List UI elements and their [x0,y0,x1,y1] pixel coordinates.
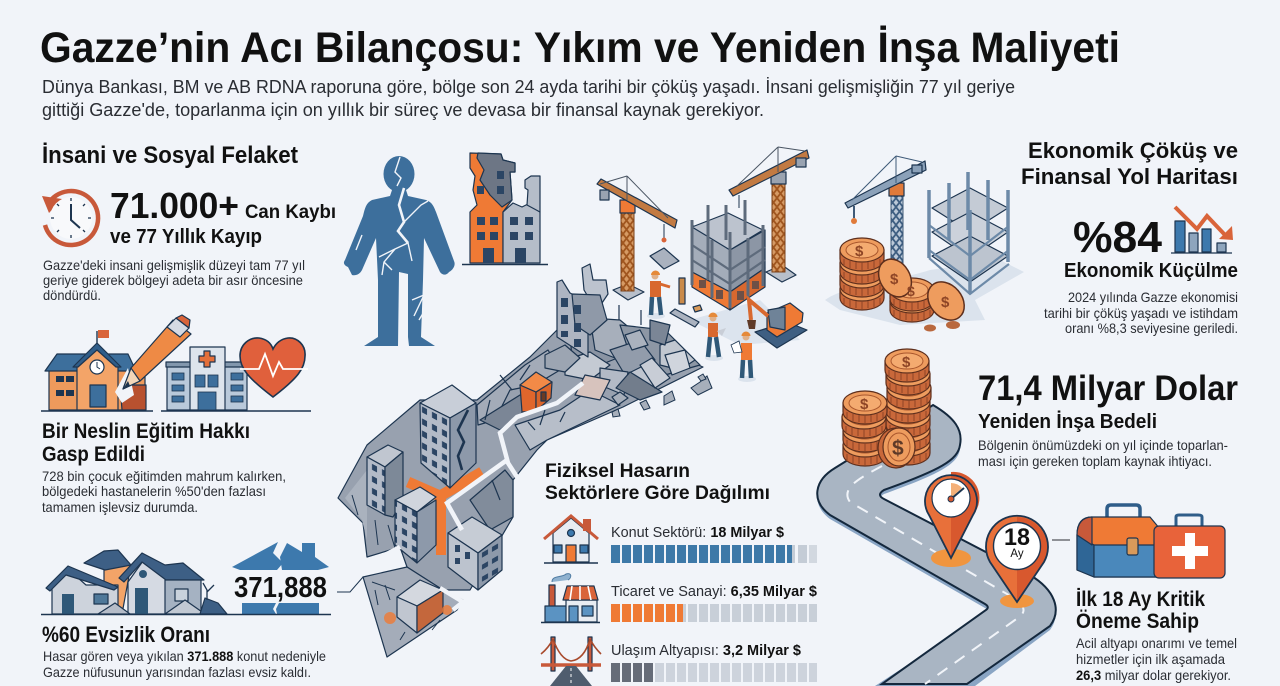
connector [1052,539,1070,541]
label: trade and industry: Ticaret ve Sanayi: 6,35 Milyar $ [611,583,818,600]
statistic: 71.000+ lives lost: ve 77 Yıllık Kayıp [110,226,262,248]
icon: broken roof with 371,888: 371,888 [234,572,327,604]
upper region of rubble [338,330,703,590]
icon: toolbox and medical kit [1077,505,1225,578]
leader line [337,577,363,592]
pin: timer [925,472,979,567]
text block: economy [1044,289,1238,336]
statistic: 71.000+ lives lost [110,185,336,248]
subheading: rebuilding cost: Yeniden İnşa Bedeli [978,410,1157,433]
label: transport: Ulaşım Altyapısı: 3,2 Milyar $ [611,642,802,659]
white cracks [363,383,583,610]
heading: education [42,419,250,466]
pin: 18 months: 18 [1004,524,1030,551]
text block: rebuilding cost: Bölgenin önümüzdeki on yıl içinde toparlan- [978,437,1228,453]
text block: first 18 months: 26,3 milyar dolar gerekiyor. [1076,667,1231,683]
text block: education: tamamen işlevsiz durumda. [42,499,198,515]
text block: economy: oranı %8,3 seviyesine geriledi. [1065,320,1238,336]
scattered debris [612,374,712,417]
bar: transport 3.2 billion [611,663,817,682]
pin: 18 months [986,516,1048,608]
construction materials [670,278,702,327]
icon: cracked human figure [344,156,455,346]
text block: education: bölgedeki hastanelerin %50'den fazlası [42,483,266,499]
statistic: 84 percent: %84 [1073,213,1163,262]
lower tower buildings and orange path [367,385,502,590]
chart heading [545,461,770,504]
crane 1 [597,176,679,300]
coin stacks: $ [855,243,864,260]
site shadow [690,300,800,345]
text block: economy: 2024 yılında Gazze ekonomisi [1068,289,1238,305]
pin: 18 months: Ay [1010,548,1024,560]
icon: destroyed houses [46,550,227,614]
illustration: reconstruction site with cranes [597,147,809,382]
lower block [363,567,463,657]
text block: first 18 months [1076,635,1237,683]
icon: factory and shop [541,574,600,622]
subtitle text: Dünya Bankası, BM ve AB RDNA raporuna göre, bölge son 24 ayda tarihi bir çöküş yaşadı. İnsani gelişmişliğin 77 yıl geriye [42,77,1015,97]
coin stacks: $ [907,283,915,299]
ruined wall [557,264,641,357]
coin stack on road: $ [892,437,904,460]
text block: first 18 months: Acil altyapı onarımı ve temel [1076,635,1237,651]
heading: first 18 months [1076,588,1205,633]
panel: economic collapse [1021,138,1238,336]
icon: house [544,516,598,563]
text block: human development: Gazze'deki insani gelişmişlik düzeyi tam 77 yıl [43,257,305,273]
coin stack on road [842,349,931,468]
text block: economy: tarihi bir çöküş yaşadı ve istihdam [1044,305,1238,321]
text block: human development [43,257,305,303]
heading: human and social: İnsani ve Sosyal Felaket [42,142,298,169]
coin stacks: $ [941,294,950,311]
ground line [41,614,331,616]
text block: human development: geriye giderek bölgeyi adeta bir asır öncesine [43,272,303,288]
heading: economic collapse: Finansal Yol Haritası [1021,164,1238,189]
panel: reconstruction cost [978,369,1238,469]
bar: housing 18 billion [611,545,817,563]
heading: economic collapse [1021,138,1238,189]
workers [647,270,756,382]
text block: homelessness [43,648,326,680]
text block: first 18 months: hizmetler için ilk aşamada [1076,651,1225,667]
map: ruined Gaza strip [337,264,712,657]
label: housing: Konut Sektörü: 18 Milyar $ [611,524,785,541]
coin stacks: $ [890,271,899,288]
coin stacks [840,238,972,332]
text block: human development: döndürdü. [43,287,101,303]
statistic: 71.4 billion dollars: 71,4 Milyar Dolar [978,369,1238,408]
building frame under construction [692,200,765,310]
illustration: coins, small crane and steel frame [825,156,1024,332]
rubble pile [545,318,700,405]
icon: falling bar chart [1171,207,1233,253]
heading: first 18 months: Öneme Sahip [1076,610,1199,633]
panel: sector damage chart [541,461,818,686]
chart heading: Sektörlere Göre Dağılımı [545,483,770,504]
text block: homelessness: Hasar gören veya yıkılan 371.888 konut nedeniyle [43,648,326,664]
illustration: road to reconstruction [817,349,1070,686]
chart heading: Fiziksel Hasarın [545,461,690,482]
coin stack on road: $ [902,354,911,371]
heading: education: Bir Neslin Eğitim Hakkı [42,419,250,443]
shadow [825,260,1024,325]
text block: rebuilding cost: ması için gereken toplam kaynak ihtiyacı. [978,453,1212,469]
subtitle text: gittiği Gazze'de, toparlanma için on yıllık bir süreç ve devasa bir finansal kaynak gerekiyor. [42,100,764,120]
heading: first 18 months: İlk 18 Ay Kritik [1076,588,1205,611]
text block: homelessness: Gazze nüfusunun yarısından fazlası evsiz kaldı. [43,664,311,680]
heading: education: Gasp Edildi [42,442,145,466]
bar: trade 6.35 billion [611,604,817,622]
panel: first 18 months [1076,505,1237,683]
heading: homelessness: %60 Evsizlik Oranı [42,622,210,647]
subtitle text [42,77,1015,120]
orange cube [520,372,552,412]
small crane [845,156,926,265]
icon: damaged building [462,153,548,264]
icon: broken roof with 371,888 [232,542,329,614]
coin stack on road: $ [860,396,869,413]
icon: clock with reverse arrow [42,191,98,245]
text block: education [42,468,286,515]
subheading: economic shrinkage: Ekonomik Küçülme [1064,260,1238,282]
statistic: 71.000+ lives lost: 71.000+ [110,185,239,226]
text block: education: 728 bin çocuk eğitimden mahrum kalırken, [42,468,286,484]
icon: hospital and heart [161,338,311,411]
steel frame [929,172,1009,294]
statistic: 71.000+ lives lost: Can Kaybı [245,202,336,223]
panel: human and social disaster [41,142,336,680]
title: Gazze’nin Acı Bilançosu: Yıkım ve Yeniden İnşa Maliyeti [40,24,1120,72]
icon: bridge [541,637,601,686]
text block: rebuilding cost [978,437,1228,469]
road [817,405,1056,686]
icon: damaged school and pencil [41,315,191,411]
crane 2 [729,147,809,282]
heading: economic collapse: Ekonomik Çöküş ve [1028,138,1238,163]
excavator [747,300,807,348]
